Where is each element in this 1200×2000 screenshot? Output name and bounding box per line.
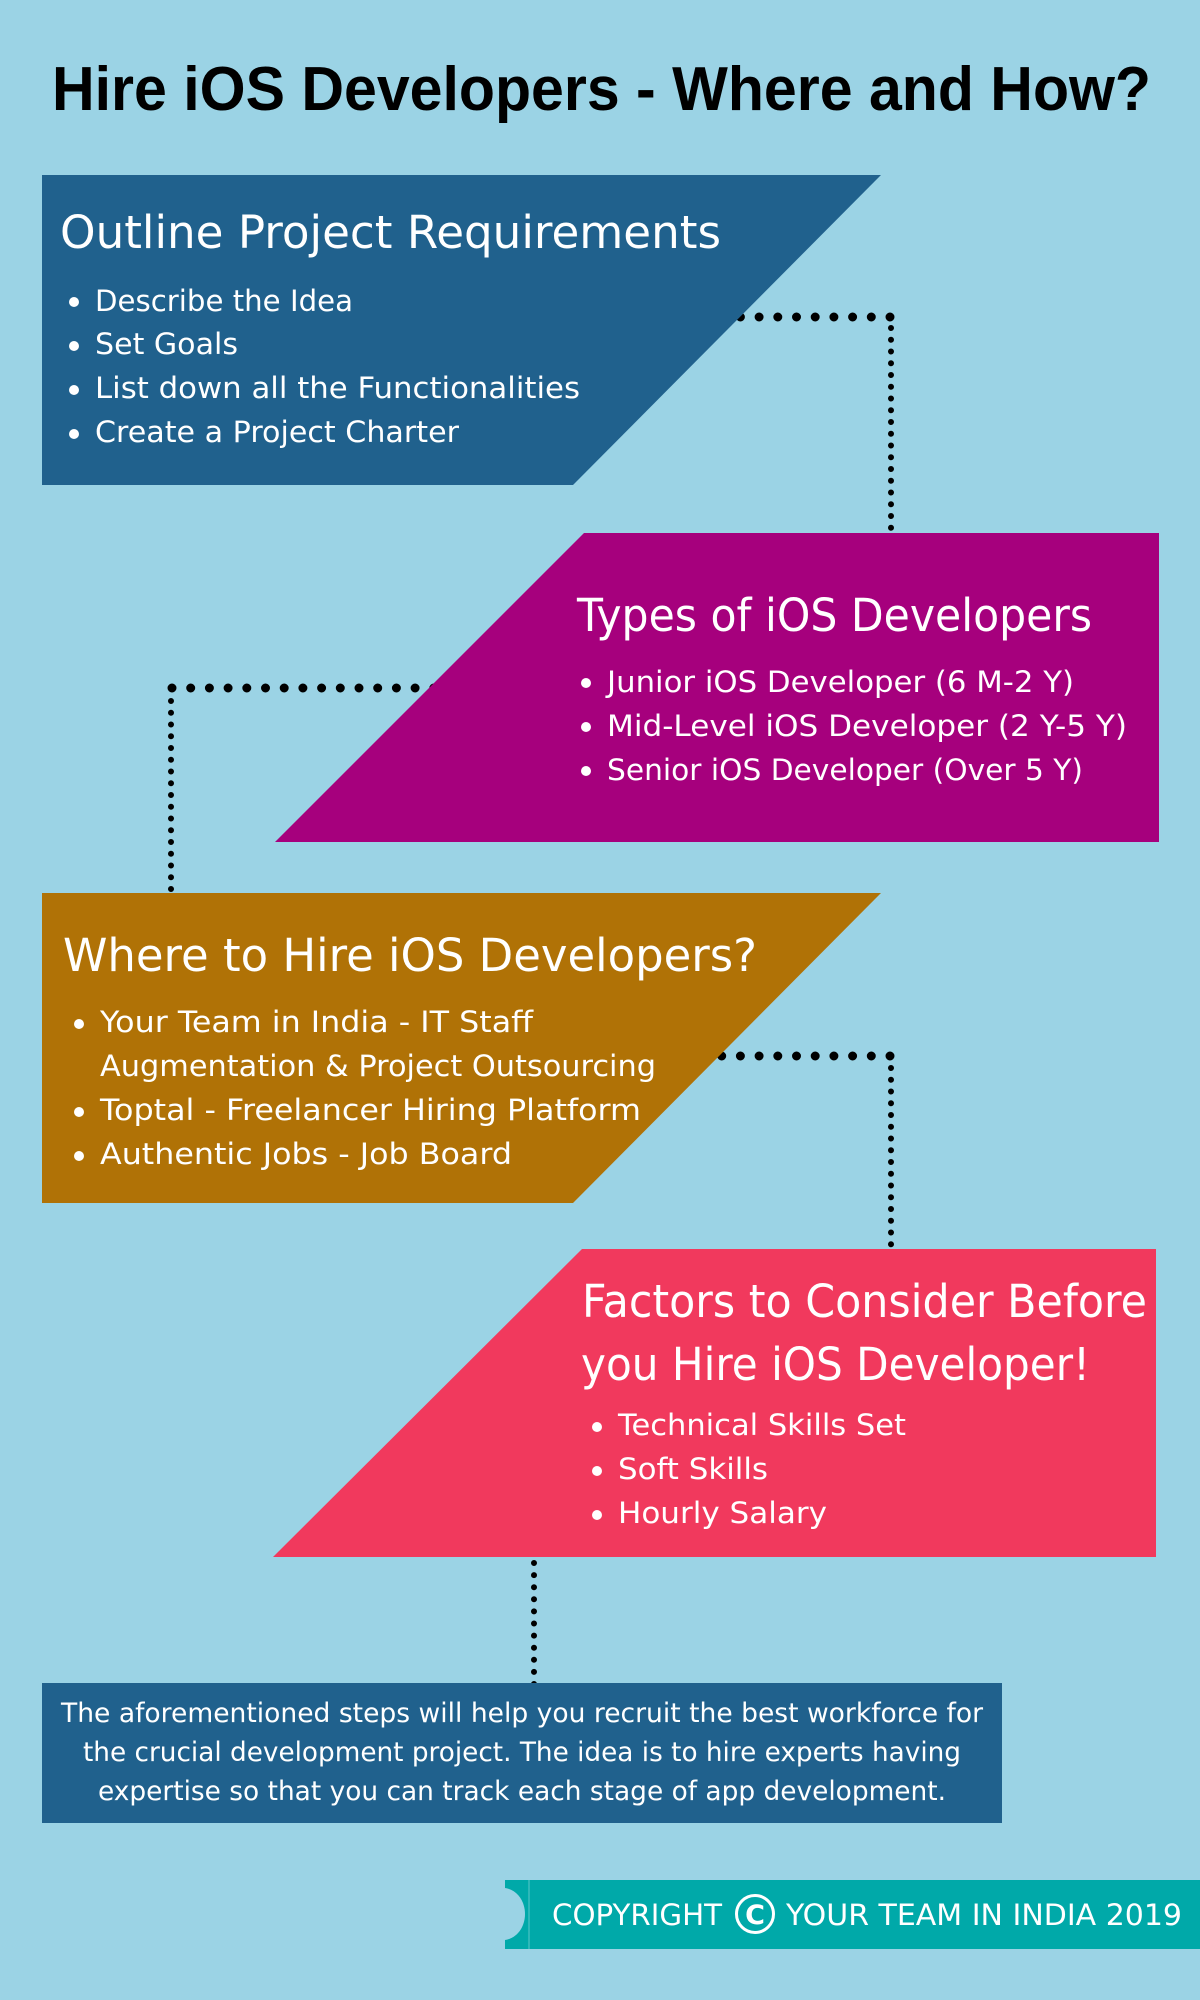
heading: factors to consider: Factors to Consider Before: [582, 1275, 1147, 1328]
list: project requirement steps: Set Goals: [95, 327, 238, 361]
arrow: connector from where to hire to factors: [710, 1056, 891, 1249]
heading: factors to consider: [581, 1275, 1147, 1391]
panel: outline project requirements: [42, 175, 881, 485]
panel: factors to consider: [273, 1249, 1156, 1557]
list: hiring sources: Toptal - Freelancer Hiring Platform: [99, 1093, 641, 1127]
list: developer levels: Junior iOS Developer (6 M-2 Y): [605, 665, 1074, 699]
list: developer levels: [581, 665, 1127, 787]
text block: summary paragraph: The aforementioned steps will help you recruit the best workforce for: [60, 1698, 984, 1729]
heading: outline project requirements: Outline Project Requirements: [60, 206, 721, 259]
list: hiring sources: Your Team in India - IT Staff: [99, 1005, 534, 1039]
list: hiring factors: [592, 1408, 906, 1530]
list: hiring factors: Technical Skills Set: [617, 1408, 906, 1442]
list: hiring factors: Hourly Salary: [618, 1496, 827, 1530]
heading: factors to consider: you Hire iOS Developer!: [581, 1338, 1090, 1391]
list: project requirement steps: List down all the Functionalities: [95, 371, 580, 405]
panel: types of iOS developers: [275, 533, 1159, 842]
list: hiring sources: Augmentation & Project Outsourcing: [100, 1049, 656, 1083]
panel: where to hire iOS developers: [42, 893, 881, 1203]
footer text: company and year: YOUR TEAM IN INDIA 2019: [785, 1898, 1182, 1932]
arrow: connector from requirements to types: [730, 317, 891, 533]
footer: copyright ribbon: [505, 1880, 1200, 1949]
text block: summary paragraph: [60, 1698, 984, 1807]
text block: summary paragraph: expertise so that you can track each stage of app development.: [98, 1776, 946, 1807]
footer text: copyright: COPYRIGHT: [552, 1898, 722, 1932]
list: developer levels: Mid-Level iOS Developer (2 Y-5 Y): [607, 709, 1127, 743]
list: hiring sources: [74, 1005, 656, 1171]
title: Hire iOS Developers - Where and How?: [52, 55, 1151, 124]
panel: closing summary: [42, 1683, 1002, 1823]
text block: summary paragraph: the crucial development project. The idea is to hire experts having: [83, 1737, 961, 1768]
icon: copyright symbol: C: [745, 1900, 765, 1931]
arrow: connector from types to where to hire: [171, 688, 440, 893]
list: project requirement steps: Create a Project Charter: [95, 415, 459, 449]
list: developer levels: Senior iOS Developer (Over 5 Y): [607, 753, 1083, 787]
arrow: connector from factors to summary: [531, 1563, 537, 1684]
icon: copyright symbol: [736, 1896, 774, 1932]
heading: types of iOS developers: Types of iOS Developers: [576, 589, 1092, 642]
list: project requirement steps: [69, 284, 580, 449]
heading: where to hire iOS developers: Where to Hire iOS Developers?: [63, 929, 757, 982]
list: hiring factors: Soft Skills: [618, 1452, 768, 1486]
list: hiring sources: Authentic Jobs - Job Board: [100, 1137, 512, 1171]
list: project requirement steps: Describe the Idea: [95, 284, 353, 318]
